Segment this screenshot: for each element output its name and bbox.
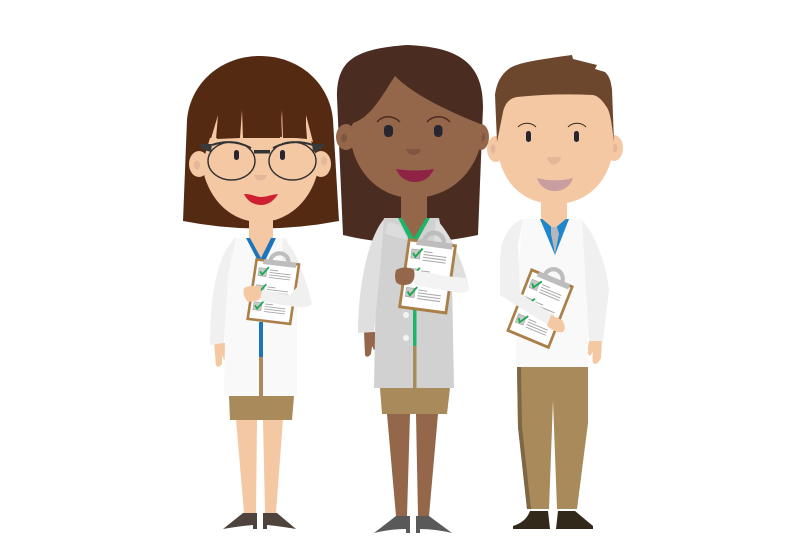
hair [337, 45, 483, 242]
left sleeve [358, 219, 384, 333]
legs [387, 414, 438, 516]
fringe highlights [210, 110, 313, 142]
lanyard [398, 218, 430, 243]
eyes [234, 150, 285, 160]
clipboard [246, 250, 302, 325]
glasses [199, 142, 325, 180]
hand [547, 315, 565, 332]
neck [401, 185, 427, 225]
mouth [396, 169, 434, 182]
shoes [513, 511, 593, 529]
left sleeve [210, 238, 236, 345]
figure: woman with glasses [183, 56, 339, 529]
neck [541, 190, 567, 219]
ears [336, 124, 489, 150]
clipboard [506, 260, 577, 349]
face [202, 138, 319, 222]
eyes [526, 131, 579, 142]
clipboard [398, 230, 458, 315]
nose [254, 175, 267, 180]
left hand [214, 343, 226, 367]
shoes [374, 516, 452, 533]
right sleeve [280, 238, 312, 307]
hand [244, 286, 261, 302]
eyebrows [518, 123, 586, 127]
legs [236, 419, 283, 513]
mouth [244, 194, 278, 205]
mouth [537, 178, 573, 191]
neck [249, 205, 273, 245]
left hand [364, 332, 376, 357]
collar and shirt [540, 219, 569, 255]
left hand [587, 341, 602, 364]
eyes [384, 125, 442, 137]
buttons [403, 312, 409, 341]
sleeve over clipboard [414, 270, 469, 293]
coat [374, 218, 454, 388]
eyebrows [377, 117, 450, 122]
ears [189, 151, 331, 177]
hand [395, 268, 414, 285]
neck opening [249, 237, 273, 259]
hair [495, 55, 614, 142]
trousers [517, 367, 588, 509]
figure: woman with long hair [336, 45, 489, 533]
figure: man [487, 55, 623, 529]
fringe [217, 110, 307, 139]
face [350, 76, 483, 198]
coat [516, 219, 588, 367]
nose [406, 149, 421, 155]
skirt [380, 388, 450, 414]
coat [224, 238, 297, 396]
lapel highlight [385, 222, 408, 240]
lanyard [246, 238, 276, 263]
hair: back [183, 56, 339, 228]
neck opening [401, 217, 427, 241]
trouser shadow [517, 367, 531, 509]
right sleeve [430, 219, 469, 293]
shoes [223, 513, 296, 529]
neck opening [541, 218, 567, 229]
tie [551, 227, 559, 254]
face [497, 88, 614, 204]
skirt [229, 396, 294, 420]
sleeve over clipboard [260, 280, 312, 307]
left sleeve [500, 219, 553, 325]
ears [487, 135, 623, 162]
nose [547, 157, 561, 164]
right sleeve [582, 220, 609, 341]
